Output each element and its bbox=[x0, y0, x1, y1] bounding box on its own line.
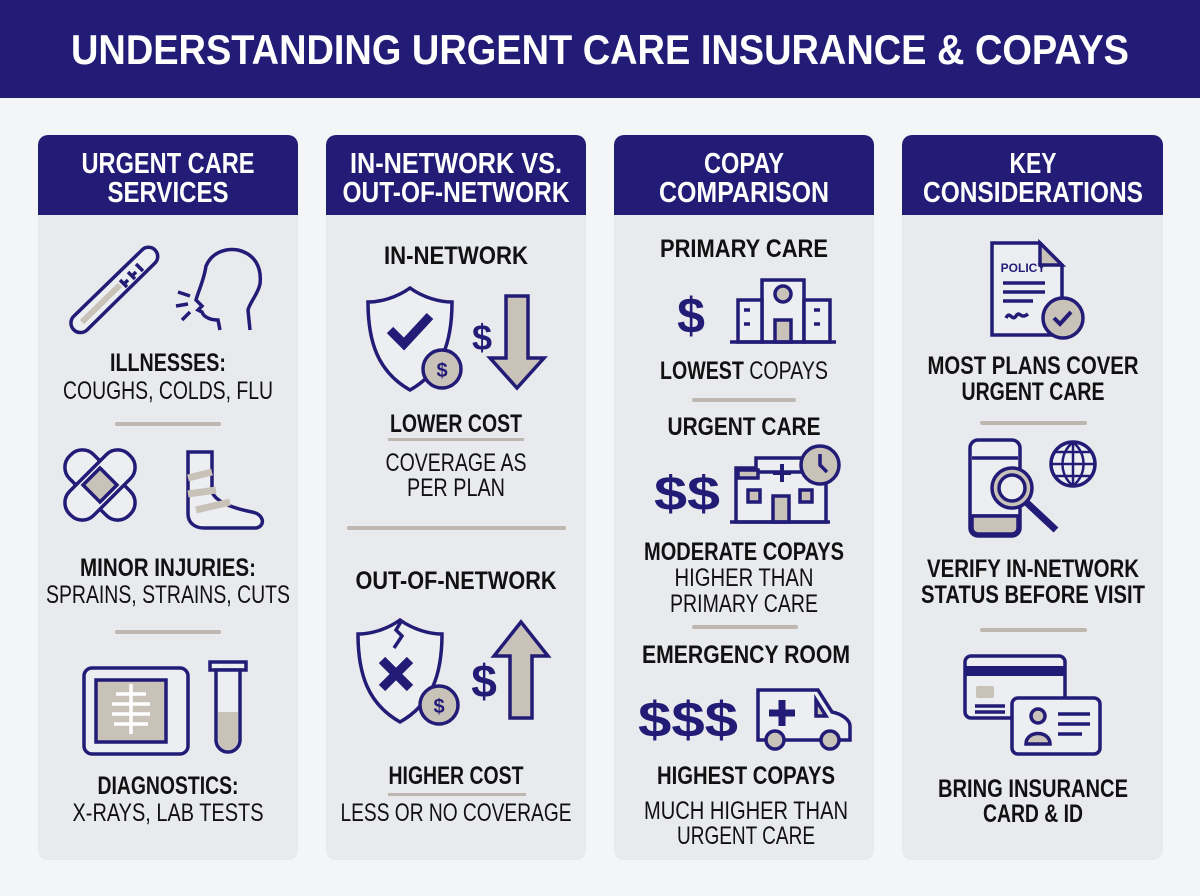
icon: double dollar: $$ bbox=[654, 468, 720, 521]
icon: sprained ankle bbox=[188, 452, 262, 528]
icon: dollar up arrow: $ bbox=[471, 655, 497, 707]
text: bring insurance card bbox=[938, 775, 1128, 828]
icon: clinic building bbox=[730, 280, 836, 342]
text: minor injuries: MINOR INJURIES: bbox=[80, 554, 256, 582]
text: lower cost: COVERAGE AS bbox=[386, 449, 526, 477]
subheading: primary care: PRIMARY CARE bbox=[660, 235, 828, 263]
text: moderate copays: HIGHER THAN bbox=[674, 564, 814, 592]
text: moderate copays: PRIMARY CARE bbox=[670, 590, 818, 618]
icon: single dollar: $ bbox=[677, 288, 705, 344]
text: highest copays: HIGHEST COPAYS bbox=[657, 762, 835, 790]
icon: bandages bbox=[58, 443, 142, 527]
heading: key considerations bbox=[923, 148, 1143, 209]
icon: x-ray bbox=[84, 668, 188, 754]
text: diagnostics: X-RAYS, LAB TESTS bbox=[72, 799, 264, 827]
heading: in-network vs out-of-network: OUT-OF-NETWORK bbox=[342, 177, 570, 209]
icon: insurance card and id bbox=[965, 656, 1100, 754]
text: illnesses: COUGHS, COLDS, FLU bbox=[63, 377, 273, 405]
icon: triple dollar: $$$ bbox=[638, 692, 738, 748]
icon: broken shield bbox=[358, 620, 458, 724]
text: moderate copays bbox=[644, 538, 844, 618]
subheading: emergency room: EMERGENCY ROOM bbox=[642, 641, 850, 669]
icon: dollar down arrow bbox=[472, 296, 544, 388]
text: lower cost: LOWER COST bbox=[390, 410, 522, 438]
icon: test tube bbox=[210, 662, 246, 752]
icon: shield check bbox=[368, 288, 461, 390]
icon: shield check: $ bbox=[436, 360, 448, 382]
icon: thermometer bbox=[71, 247, 158, 333]
heading: key considerations: CONSIDERATIONS bbox=[923, 177, 1143, 209]
text: illnesses bbox=[63, 349, 273, 405]
subheading: urgent care: URGENT CARE bbox=[668, 413, 820, 441]
panel: copay comparison bbox=[614, 135, 874, 860]
icon: phone with magnifier and globe bbox=[970, 440, 1095, 536]
text: illnesses: ILLNESSES: bbox=[110, 349, 226, 377]
icon: policy document: POLICY bbox=[1001, 261, 1045, 275]
text: higher cost bbox=[340, 762, 572, 827]
heading: copay comparison: COMPARISON bbox=[659, 177, 829, 209]
text: verify in-network bbox=[921, 555, 1145, 609]
text: verify in-network: STATUS BEFORE VISIT bbox=[921, 581, 1145, 609]
icon: urgent care building with clock bbox=[730, 446, 839, 522]
text: verify in-network: VERIFY IN-NETWORK bbox=[927, 555, 1139, 583]
heading: in-network vs out-of-network bbox=[342, 148, 570, 209]
heading: urgent care services: SERVICES bbox=[108, 177, 228, 209]
icon: dollar up arrow bbox=[471, 622, 548, 718]
heading: copay comparison bbox=[659, 148, 829, 209]
text: lower cost bbox=[386, 410, 526, 502]
heading: urgent care services: URGENT CARE bbox=[82, 148, 254, 180]
text: highest copays: MUCH HIGHER THAN bbox=[644, 797, 848, 825]
text: diagnostics bbox=[72, 772, 264, 827]
text: highest copays bbox=[644, 762, 848, 850]
icon: broken shield: $ bbox=[433, 696, 445, 718]
subheading: out-of-network: OUT-OF-NETWORK bbox=[356, 567, 556, 595]
heading: in-network vs out-of-network: IN-NETWORK VS. bbox=[350, 148, 562, 180]
text: minor injuries: SPRAINS, STRAINS, CUTS bbox=[46, 581, 290, 609]
text: diagnostics: DIAGNOSTICS: bbox=[98, 772, 238, 800]
text: lowest copays: LOWEST COPAYS bbox=[660, 357, 828, 385]
text: minor injuries bbox=[46, 554, 290, 609]
title bar bbox=[0, 0, 1200, 98]
text: most plans cover urgent care: MOST PLANS COVER bbox=[928, 352, 1138, 380]
text: higher cost: HIGHER COST bbox=[388, 762, 524, 790]
text: moderate copays: MODERATE COPAYS bbox=[644, 538, 844, 566]
heading: urgent care services bbox=[82, 148, 254, 209]
icon: ambulance bbox=[758, 690, 850, 749]
text: bring insurance card: BRING INSURANCE bbox=[938, 775, 1128, 803]
subheading: in-network: IN-NETWORK bbox=[384, 242, 528, 270]
heading: key considerations: KEY bbox=[1010, 148, 1056, 180]
text: bring insurance card: CARD & ID bbox=[983, 800, 1083, 828]
text: most plans cover urgent care: URGENT CARE bbox=[962, 378, 1104, 406]
panel: key considerations bbox=[902, 135, 1163, 860]
icon: policy document bbox=[992, 243, 1083, 338]
text: lower cost: PER PLAN bbox=[407, 474, 505, 502]
text: higher cost: LESS OR NO COVERAGE bbox=[340, 799, 572, 827]
icon: coughing head bbox=[176, 250, 260, 330]
panel: urgent care services bbox=[38, 135, 298, 860]
icon: dollar down arrow: $ bbox=[472, 317, 492, 358]
text: highest copays: URGENT CARE bbox=[677, 822, 815, 850]
heading: copay comparison: COPAY bbox=[704, 148, 784, 180]
text: most plans cover urgent care bbox=[928, 352, 1138, 406]
panel: in-network vs out-of-network bbox=[326, 135, 586, 860]
